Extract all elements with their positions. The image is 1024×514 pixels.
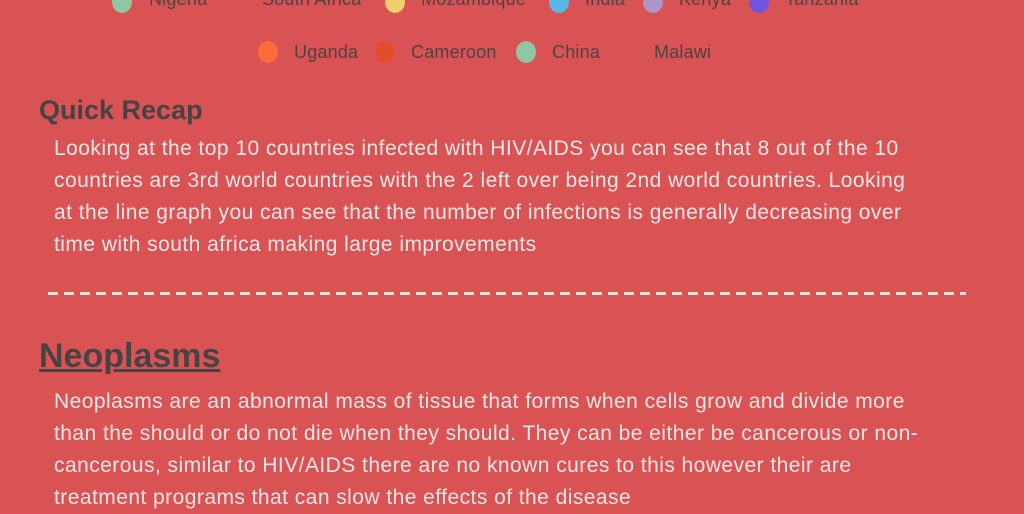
text: recap paragraph: time with south africa making large improvements (54, 233, 537, 256)
text: recap paragraph: at the line graph you can see that the number of infections is generally decreasing over (54, 201, 901, 224)
legend: Uganda (294, 42, 358, 62)
text: neoplasms paragraph: treatment programs that can slow the effects of the disease (54, 486, 631, 509)
legend: Cameroon (411, 42, 497, 62)
text: neoplasms paragraph: Neoplasms are an abnormal mass of tissue that forms when cells grow and divide more (54, 390, 905, 413)
text: neoplasms paragraph (54, 390, 918, 509)
text: recap paragraph: countries are 3rd world countries with the 2 left over being 2nd world countries. Looking (54, 169, 905, 192)
legend: Malawi (654, 42, 711, 62)
text: recap paragraph: Looking at the top 10 countries infected with HIV/AIDS you can see that 8 out of the 10 (54, 137, 899, 160)
heading: Quick Recap: Quick Recap (39, 95, 203, 125)
legend (112, 0, 859, 63)
legend: China (552, 42, 600, 62)
text: neoplasms paragraph: than the should or do not die when they should. They can be either be cancerous or non- (54, 422, 918, 445)
text: recap paragraph (54, 137, 905, 256)
text: neoplasms paragraph: cancerous, similar to HIV/AIDS there are no known cures to this however their are (54, 454, 851, 477)
heading: Neoplasms: Neoplasms (39, 337, 220, 375)
